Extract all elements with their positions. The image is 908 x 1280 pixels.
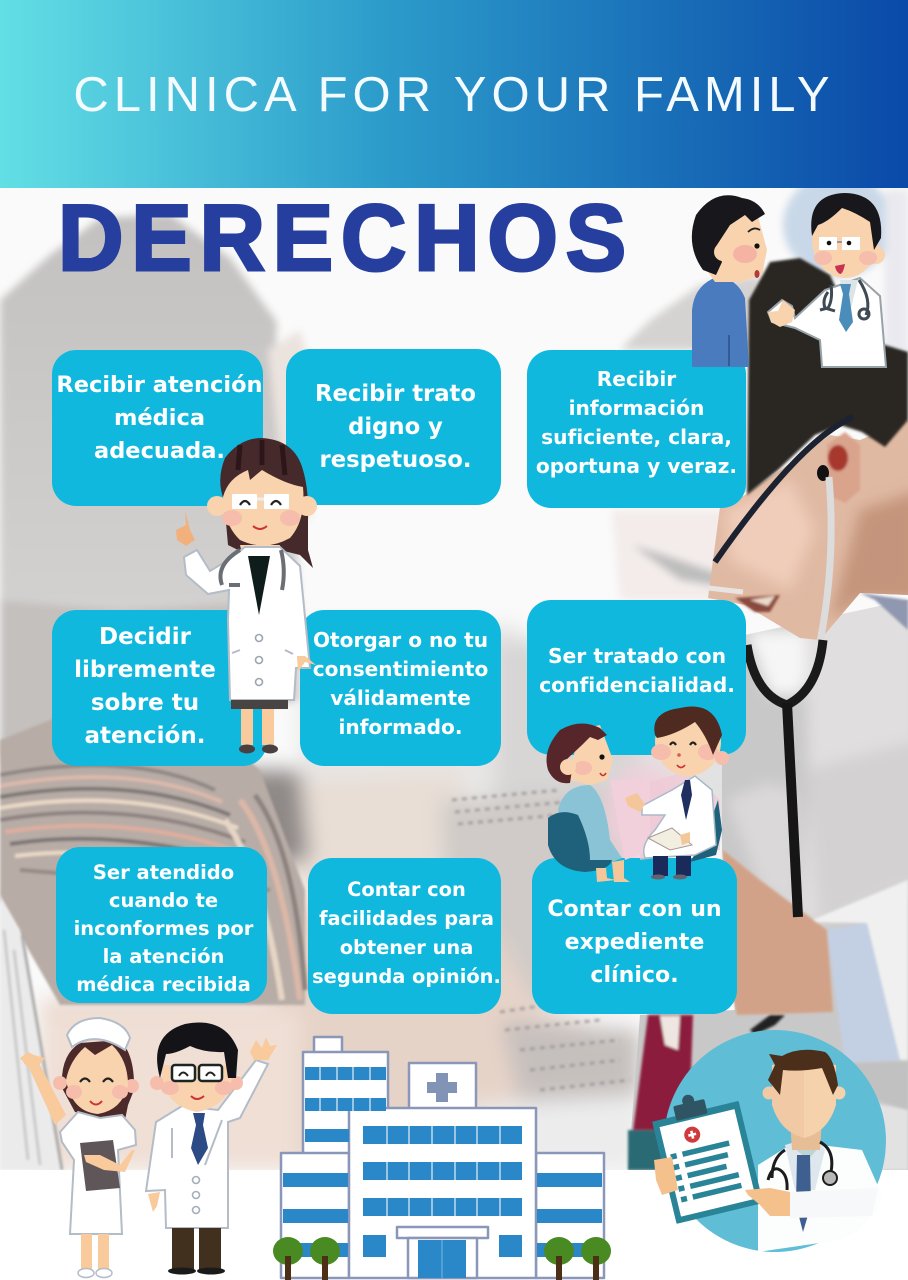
mouth	[735, 595, 780, 612]
card: consentimiento: informado.	[338, 715, 462, 739]
red blanket	[628, 1015, 693, 1170]
card: atención médica: médica	[114, 404, 205, 430]
glasses	[715, 417, 853, 562]
sleeve and cuff	[807, 880, 908, 1060]
card: decidir: libremente	[74, 657, 216, 683]
icon: patient and doctor top right	[692, 193, 886, 367]
stethoscope	[817, 465, 829, 481]
icon: doctor consulting patient	[546, 707, 729, 882]
collar	[860, 593, 908, 630]
card: segunda opinión: obtener una	[340, 936, 473, 959]
icon: doctor with clipboard in circle	[648, 1030, 900, 1255]
card: confidencialidad	[527, 600, 746, 755]
icon: nurse	[20, 1018, 139, 1278]
card: trato digno: Recibir trato	[315, 380, 476, 406]
card: trato digno: respetuoso.	[320, 446, 472, 472]
card: información: Recibir	[597, 367, 676, 391]
sharp doctor photo	[620, 258, 908, 1180]
card: inconformes: médica recibida	[76, 973, 251, 996]
card: consentimiento: válidamente	[330, 686, 471, 710]
card: segunda opinión: facilidades para	[319, 907, 494, 930]
hand	[723, 850, 833, 1015]
card: inconformes: Ser atendido	[93, 861, 234, 884]
background photo: parent, baby and doctor	[0, 188, 908, 1170]
card: información: suficiente, clara,	[541, 425, 732, 449]
icon: male doctor waving	[146, 1022, 277, 1274]
grey backdrop and lab coat	[620, 590, 908, 1180]
card: decidir: Decidir	[99, 624, 191, 650]
card: confidencialidad: Ser tratado con	[548, 644, 726, 668]
card: inconformes: inconformes por	[74, 917, 253, 940]
card: decidir	[52, 610, 267, 766]
card: atención médica: adecuada.	[94, 438, 225, 464]
card: decidir: atención.	[85, 723, 205, 749]
card: trato digno	[286, 349, 501, 505]
ear	[827, 432, 860, 503]
faded book pages at left	[0, 895, 62, 1170]
card: inconformes: cuando te	[109, 889, 218, 912]
card: segunda opinión: segunda opinión.	[312, 965, 501, 988]
card: expediente: clínico.	[590, 962, 679, 988]
card: atención médica: Recibir atención	[56, 372, 263, 398]
card: confidencialidad: confidencialidad.	[539, 672, 735, 696]
card: consentimiento: consentimiento	[313, 657, 488, 681]
card: información: información	[569, 396, 704, 420]
card: expediente: expediente	[565, 928, 704, 954]
card: segunda opinión: Contar con	[347, 878, 466, 901]
hair	[747, 258, 908, 495]
card: información: oportuna y veraz.	[536, 454, 737, 478]
card: inconformes: la atención	[103, 945, 224, 968]
card: segunda opinión	[308, 858, 501, 1014]
card: consentimiento: Otorgar o no tu	[313, 628, 488, 652]
card: expediente	[532, 858, 737, 1014]
card: trato digno: digno y	[348, 414, 443, 440]
faded shoulder behind patient	[612, 173, 908, 600]
heading: DERECHOS: DERECHOS	[58, 185, 634, 290]
faded striped sweater	[0, 680, 630, 1090]
card: inconformes	[56, 847, 267, 1003]
card: expediente: Contar con un	[547, 896, 722, 922]
icon: hospital building	[273, 1037, 611, 1280]
check fabric	[452, 790, 630, 1090]
header title: CLINICA FOR YOUR FAMILY	[73, 68, 835, 122]
card: atención médica	[52, 350, 263, 506]
card: información	[527, 350, 746, 508]
card: consentimiento	[300, 610, 501, 766]
faded baby and blanket	[40, 625, 740, 1170]
neck and face	[700, 415, 908, 645]
card: decidir: sobre tu	[91, 690, 199, 716]
header banner	[0, 0, 908, 188]
faded parent hair	[0, 214, 325, 760]
icon: woman doctor pointing	[176, 438, 317, 754]
bottom white strip	[0, 1170, 908, 1280]
